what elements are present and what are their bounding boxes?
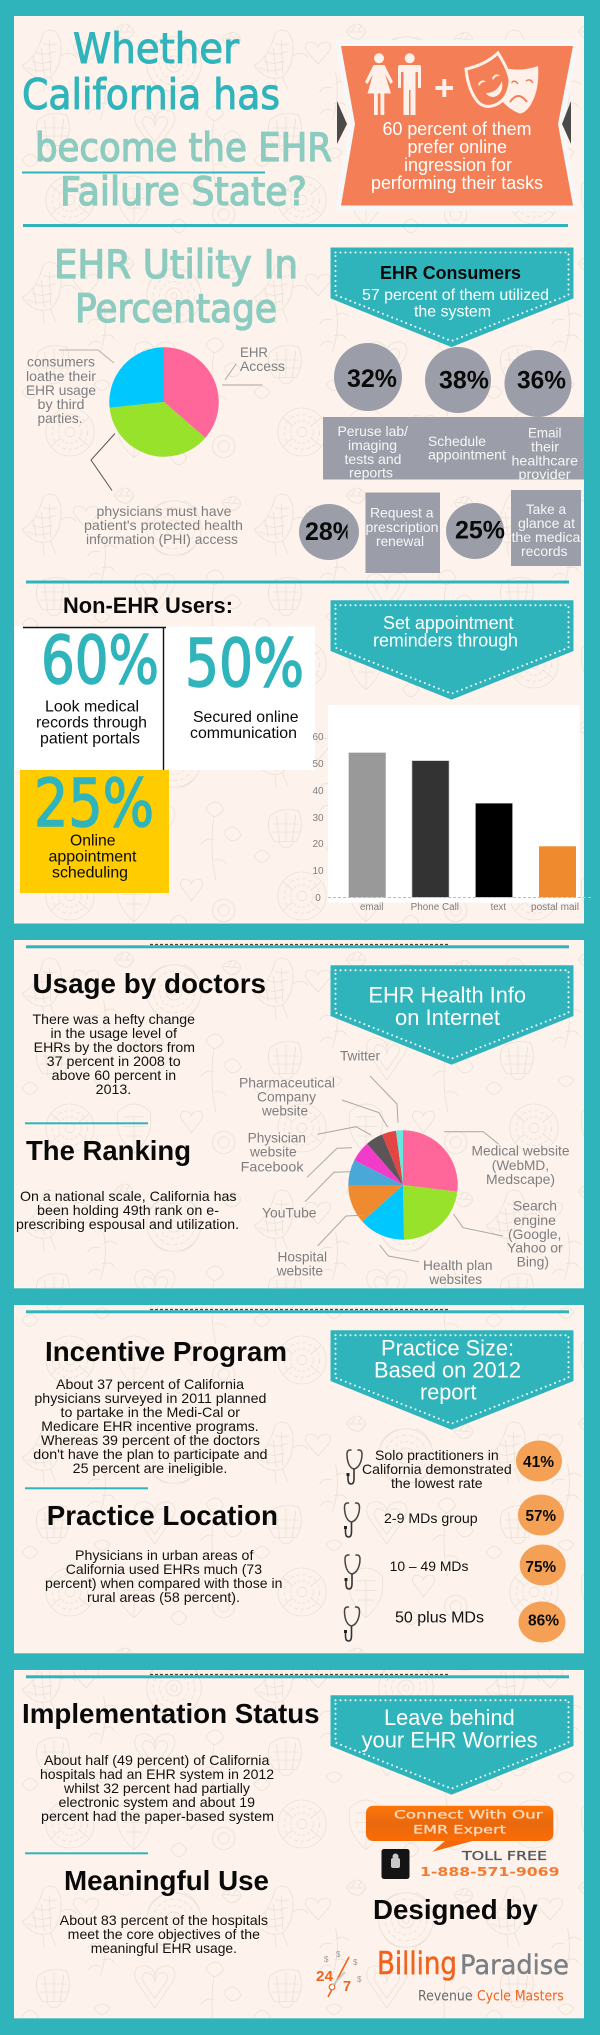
panel: glance at medical records: Take a xyxy=(526,501,566,517)
bar: email xyxy=(349,753,386,897)
pie labels and leader lines: engine xyxy=(514,1212,556,1228)
panel: intro and EHR utility xyxy=(14,16,592,924)
stat: 25% online appointment scheduling: Online xyxy=(70,832,116,850)
text block: Implementation Status: About half (49 percent) of California xyxy=(44,1752,270,1768)
logo: Billing Paradise: Cycle Masters xyxy=(477,1988,564,2004)
ribbon: Practice Size: Practice Size: xyxy=(381,1336,514,1361)
ribbon: Set appointment reminders: reminders through xyxy=(373,630,518,650)
label: physicians: patient's protected health xyxy=(84,517,243,533)
icon: 24/7 clock: $ xyxy=(324,1955,329,1964)
text block: Implementation Status xyxy=(22,1698,320,1824)
pie labels and leader lines: (Google, xyxy=(508,1226,561,1242)
title: Failure State? xyxy=(60,170,307,215)
panel: consumer tasks: Schedule xyxy=(428,433,486,449)
pie labels and leader lines: Search xyxy=(513,1198,557,1214)
icon: 24/7 clock: $ xyxy=(353,1958,358,1967)
panel: glance at medical records: glance at xyxy=(518,515,575,531)
title: California has xyxy=(22,70,280,119)
text block: Meaningful Use: About 83 percent of the hospitals xyxy=(60,1912,268,1928)
text block: Incentive Program: About 37 percent of California xyxy=(56,1376,244,1392)
label: EHR Access: EHR xyxy=(240,344,268,360)
stat: 32% xyxy=(334,343,402,411)
bar chart: appointment reminders: 30 xyxy=(312,813,324,824)
panel: implementation and credits xyxy=(14,1670,584,2018)
stat: 25%: 25% xyxy=(455,516,505,544)
text block: Usage by doctors: There was a hefty change xyxy=(32,1011,195,1027)
ribbon: EHR Consumers xyxy=(331,248,573,346)
callout: online ingression: performing their tasks xyxy=(371,173,543,193)
panel: request a prescription renewal: renewal xyxy=(376,533,424,549)
pie labels and leader lines: Health plan xyxy=(423,1257,492,1273)
pie labels and leader lines: Pharmaceutical xyxy=(239,1075,335,1091)
label: consumers xyxy=(26,350,114,426)
ribbon: EHR Consumers: the system xyxy=(414,304,491,320)
pie labels and leader lines: website xyxy=(249,1144,297,1160)
text block: Incentive Program: physicians surveyed in 2011 planned xyxy=(34,1390,266,1406)
panel: glance at medical records: the medical xyxy=(512,529,584,545)
text block: Implementation Status: percent had the paper-based system xyxy=(41,1808,274,1824)
bar chart: appointment reminders: 10 xyxy=(312,866,324,877)
stat: 25% online appointment scheduling xyxy=(20,765,169,893)
title xyxy=(22,24,332,215)
row: 50 plus MDs: 50 plus MDs xyxy=(395,1610,484,1627)
panel: consumer tasks: provider xyxy=(518,466,571,482)
stat: 28%: 28% xyxy=(305,518,355,546)
pie labels and leader lines: Hospital xyxy=(278,1249,327,1265)
bar chart: appointment reminders xyxy=(312,705,592,913)
pie labels and leader lines: Bing) xyxy=(517,1254,549,1270)
stat: 50% xyxy=(185,625,304,742)
text block: Usage by doctors: above 60 percent in xyxy=(52,1067,176,1083)
panel: consumer tasks xyxy=(323,417,584,482)
icon: 24/7 clock xyxy=(316,1950,362,1997)
heading: EHR Utility In Percentage xyxy=(54,243,298,332)
panel: consumer tasks: tests and xyxy=(344,451,402,467)
stat: 25% online appointment scheduling: scheduling xyxy=(52,864,128,882)
bar chart: appointment reminders: Phone Call xyxy=(411,902,459,913)
panel: consumer tasks: appointment xyxy=(428,446,506,462)
pie labels and leader lines: (WebMD, xyxy=(492,1157,549,1173)
row: 10-49 MDs: 10 – 49 MDs xyxy=(390,1558,468,1574)
pie labels and leader lines: Company xyxy=(257,1089,316,1105)
stat: 36%: 36% xyxy=(517,366,566,394)
pie labels and leader lines: Yahoo or xyxy=(507,1240,563,1256)
row: solo practitioners: California demonstrated xyxy=(362,1461,512,1477)
ribbon: Leave behind your EHR Worries xyxy=(331,1696,573,1794)
icon: plus xyxy=(436,79,453,97)
ribbon: Practice Size xyxy=(331,1331,573,1429)
ribbon: EHR Health Info xyxy=(331,966,573,1064)
panel: incentive and practice xyxy=(14,1305,584,1653)
pie chart: health info sources xyxy=(348,1130,458,1240)
icon: 24/7 clock: 7 xyxy=(343,1978,351,1995)
stat: 38%: 38% xyxy=(439,366,489,394)
bar: text xyxy=(476,803,512,897)
pie labels and leader lines: Twitter xyxy=(340,1048,380,1064)
bar chart: appointment reminders: 60 xyxy=(312,732,324,743)
logo: Billing Paradise: Paradise xyxy=(460,1950,569,1981)
row: solo practitioners: 41% xyxy=(523,1454,554,1471)
callout: online ingression xyxy=(335,40,579,211)
text block: Practice Location: Practice Location xyxy=(47,1500,278,1531)
icon: woman and man xyxy=(365,53,421,115)
text block: Incentive Program: Medicare EHR incentive programs. xyxy=(41,1418,259,1434)
pie labels and leader lines: Facebook xyxy=(241,1159,305,1175)
row: 10-49 MDs: 75% xyxy=(526,1559,556,1576)
text block: Usage by doctors: Usage by doctors xyxy=(32,968,266,999)
pie labels and leader lines: Physician xyxy=(248,1130,306,1146)
row: 50 plus MDs xyxy=(344,1602,566,1642)
row: 10-49 MDs xyxy=(344,1544,566,1589)
text block: Implementation Status: hospitals had an EHR system in 2012 xyxy=(40,1766,274,1782)
ribbon: Set appointment reminders: Set appointment xyxy=(383,613,514,633)
text block: The Ranking: prescribing espousal and utilization. xyxy=(16,1216,239,1232)
heading: EHR Utility In Percentage: Percentage xyxy=(75,287,277,332)
label: consumers: EHR usage xyxy=(26,382,96,398)
ribbon: Leave behind your EHR Worries: Leave behind xyxy=(384,1705,515,1730)
row: solo practitioners xyxy=(346,1440,562,1491)
stat: 60%: patient portals xyxy=(40,730,140,748)
bar: phone call xyxy=(412,761,449,897)
text block: Usage by doctors xyxy=(32,968,266,1097)
ribbon: EHR Consumers: 57 percent of them utilized xyxy=(362,287,549,304)
pie labels and leader lines: website xyxy=(261,1103,308,1119)
pie labels and leader lines: Medscape) xyxy=(486,1171,555,1187)
ribbon: Leave behind your EHR Worries: your EHR Worries xyxy=(362,1727,538,1752)
panel: request a prescription renewal: Request a xyxy=(370,504,434,520)
stat: 60% xyxy=(36,622,159,748)
icon: 24/7 clock: 24 xyxy=(316,1968,334,1985)
call to action: connect with our EMR expert: EMR Expert xyxy=(413,1822,507,1836)
stat: 60%: records through xyxy=(36,714,147,732)
pie labels and leader lines: website xyxy=(276,1263,323,1279)
text block: Usage by doctors: 2013. xyxy=(96,1081,131,1097)
text block: Incentive Program: to partake in the Medi-Cal or xyxy=(60,1404,240,1420)
call to action: connect with our EMR expert: Connect With Our xyxy=(394,1808,543,1822)
title: become the EHR xyxy=(35,126,332,171)
heading: Designed by: Designed by xyxy=(373,1894,538,1925)
panel: usage and ranking xyxy=(14,940,584,1288)
call to action: connect with our EMR expert: TOLL FREE xyxy=(461,1849,547,1863)
label: physicians: physicians must have xyxy=(96,503,232,519)
panel: request a prescription renewal: prescription xyxy=(366,519,438,535)
text block: Meaningful Use: meet the core objectives of the xyxy=(68,1926,260,1942)
stat: 60%: Look medical xyxy=(45,698,139,716)
label: EHR Access: Access xyxy=(240,358,285,374)
stat: 32%: 32% xyxy=(347,365,397,393)
label: consumers: by third xyxy=(38,396,84,412)
text block: Usage by doctors: in the usage level of xyxy=(50,1025,177,1041)
text block: Practice Location: Physicians in urban areas of xyxy=(75,1547,254,1563)
pie labels and leader lines: YouTube xyxy=(262,1204,317,1220)
stat: 25% online appointment scheduling: appointment xyxy=(48,848,137,866)
label: physicians: information (PHI) access xyxy=(86,531,238,547)
callout: online ingression: ingression for xyxy=(404,155,512,175)
panel: consumer tasks: reports xyxy=(349,464,393,480)
text block: Incentive Program: Whereas 39 percent of the doctors xyxy=(41,1432,260,1448)
title: Whether xyxy=(73,24,240,73)
text block: Meaningful Use: Meaningful Use xyxy=(64,1865,269,1896)
bar: postal mail xyxy=(539,846,576,897)
label: consumers: loathe their xyxy=(26,368,96,384)
text block: Practice Location: percent) when compared with those in xyxy=(45,1575,282,1591)
stat: 38% xyxy=(425,347,491,413)
row: 2-9 MDs group: 57% xyxy=(526,1508,556,1525)
logo: Billing Paradise xyxy=(316,1946,569,2004)
panel: consumer tasks: Email xyxy=(528,424,562,440)
panel: consumer tasks: Peruse lab/ xyxy=(338,423,408,439)
bar chart: appointment reminders: postal mail xyxy=(531,902,579,913)
logo: Billing Paradise: Revenue xyxy=(418,1988,473,2004)
heading: Non-EHR Users: Non-EHR Users: xyxy=(63,593,233,618)
stat: 50%: Secured online xyxy=(193,709,299,726)
icon: stethoscope xyxy=(344,1607,360,1641)
ribbon: EHR Consumers: EHR Consumers xyxy=(380,263,521,283)
panel: request a prescription renewal xyxy=(366,492,440,573)
text block: The Ranking: The Ranking xyxy=(26,1135,191,1166)
panel: consumer tasks: their xyxy=(531,438,559,454)
icon: theatre masks xyxy=(466,53,538,114)
row: 2-9 MDs group: 2-9 MDs group xyxy=(384,1510,478,1526)
icon: stethoscope xyxy=(344,1555,360,1589)
ribbon: EHR Health Info: on Internet xyxy=(395,1005,500,1030)
logo: Billing Paradise: Billing xyxy=(377,1946,457,1982)
stat: 50%: communication xyxy=(190,725,297,742)
icon: phone xyxy=(382,1849,410,1879)
text block: Usage by doctors: 37 percent in 2008 to xyxy=(47,1053,181,1069)
pie labels and leader lines: Medical website xyxy=(472,1143,570,1159)
bar chart: appointment reminders: 0 xyxy=(315,893,321,904)
row: solo practitioners: the lowest rate xyxy=(391,1475,483,1491)
text block: Usage by doctors: EHRs by the doctors from xyxy=(34,1039,195,1055)
bar chart: appointment reminders: 20 xyxy=(312,839,324,850)
label: consumers: consumers xyxy=(27,354,95,370)
call to action: connect with our EMR expert: 1-888-571-9069 xyxy=(420,1865,560,1879)
text block: Meaningful Use: meaningful EHR usage. xyxy=(91,1940,237,1956)
stat: 60%: 60% xyxy=(41,622,159,699)
pie chart: EHR utility xyxy=(109,347,219,457)
text block: Practice Location xyxy=(45,1500,282,1605)
label: consumers: parties. xyxy=(38,410,82,426)
stat: 25% xyxy=(446,503,505,559)
icon: stethoscope xyxy=(346,1450,362,1484)
callout: online ingression: prefer online xyxy=(408,137,507,157)
panel: non-EHR statistics xyxy=(14,622,315,770)
icon: 24/7 clock: $ xyxy=(336,1950,341,1959)
panel: glance at medical records xyxy=(511,490,584,566)
pie labels and leader lines xyxy=(239,1048,570,1287)
stat: 50%: 50% xyxy=(185,625,304,702)
label: EHR Access xyxy=(222,344,285,385)
row: solo practitioners: Solo practitioners in xyxy=(375,1447,499,1463)
panel: glance at medical records: records xyxy=(521,543,568,559)
text block: Implementation Status: Implementation Status xyxy=(22,1698,320,1729)
pie labels and leader lines: websites xyxy=(428,1271,482,1287)
panel: consumer tasks: imaging xyxy=(348,437,397,453)
ribbon: Practice Size: Based on 2012 xyxy=(374,1358,521,1383)
row: 2-9 MDs group xyxy=(344,1494,564,1537)
text block: Practice Location: rural areas (58 percent). xyxy=(87,1589,240,1605)
stat: 36% xyxy=(504,350,572,417)
icon: stethoscope xyxy=(344,1503,360,1537)
bar chart: appointment reminders: 50 xyxy=(312,759,324,770)
text block: Incentive Program xyxy=(33,1336,287,1476)
row: 50 plus MDs: 86% xyxy=(528,1613,559,1630)
label: physicians xyxy=(84,434,243,547)
text block: The Ranking xyxy=(16,1135,239,1232)
stat: 28% xyxy=(299,504,359,560)
callout: online ingression: 60 percent of them xyxy=(382,119,532,139)
ribbon: EHR Health Info: EHR Health Info xyxy=(368,983,526,1008)
text block: Incentive Program: 25 percent are ineligible. xyxy=(73,1460,227,1476)
bar chart: appointment reminders: email xyxy=(360,902,384,913)
bar chart: appointment reminders: text xyxy=(491,902,506,913)
text block: Meaningful Use xyxy=(60,1865,269,1956)
text block: Incentive Program: Incentive Program xyxy=(45,1336,287,1367)
text block: The Ranking: been holding 49th rank on e- xyxy=(37,1202,219,1218)
call to action: connect with our EMR expert xyxy=(366,1806,560,1879)
text block: Implementation Status: whilst 32 percent had partially xyxy=(63,1780,250,1796)
icon: 24/7 clock: $ xyxy=(357,1975,362,1984)
text block: Implementation Status: electronic system and about 19 xyxy=(58,1794,255,1810)
text block: Incentive Program: don't have the plan to participate and xyxy=(33,1446,267,1462)
bar chart: appointment reminders: 40 xyxy=(312,786,324,797)
heading: EHR Utility In Percentage: EHR Utility In xyxy=(54,243,298,288)
stat: 25% online appointment scheduling: 25% xyxy=(34,765,154,842)
ribbon: Practice Size: report xyxy=(420,1379,476,1404)
text block: The Ranking: On a national scale, California has xyxy=(20,1188,236,1204)
panel: consumer tasks: healthcare xyxy=(512,452,578,468)
text block: Practice Location: California used EHRs much (73 xyxy=(66,1561,262,1577)
ribbon: Set appointment reminders xyxy=(331,601,573,699)
